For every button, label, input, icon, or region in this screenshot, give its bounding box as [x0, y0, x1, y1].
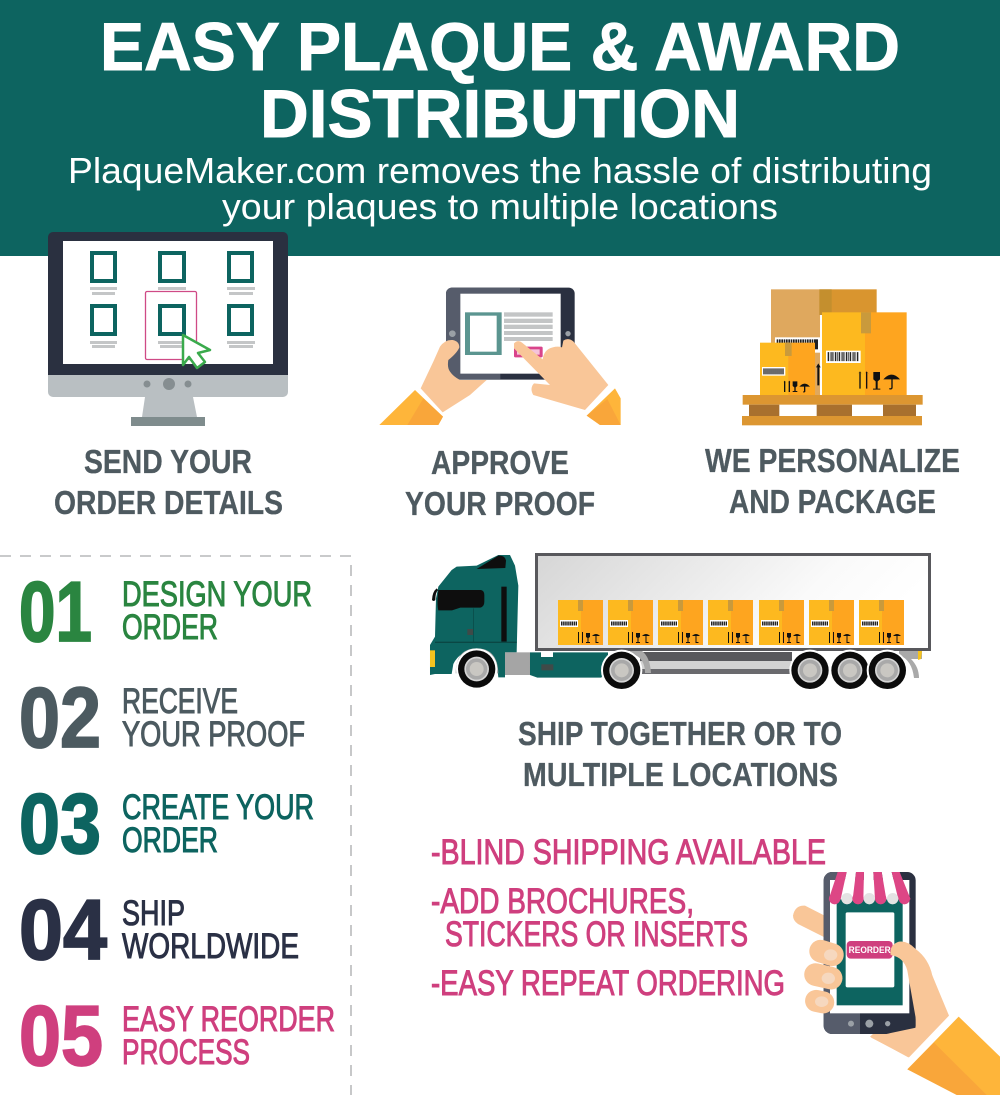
step 03: [19, 777, 314, 872]
step 02: RECEIVE: [122, 682, 238, 721]
step 04: SHIP: [122, 894, 185, 933]
reorder button: REORDER: [849, 945, 891, 955]
subtitle: [68, 150, 932, 227]
subtitle: your plaques to multiple locations: [222, 186, 778, 227]
title: EASY PLAQUE & AWARD: [100, 9, 900, 85]
label: send your order details: ORDER DETAILS: [54, 484, 283, 521]
label: ship together or to multiple locations: [518, 715, 842, 793]
label: approve your proof: APPROVE: [431, 444, 569, 481]
step 05: 05: [19, 989, 103, 1084]
reorder button: [847, 941, 893, 959]
rear wheels: [789, 650, 908, 691]
step 03: CREATE YOUR: [122, 788, 314, 827]
step 04: [19, 883, 299, 978]
feature list: -EASY REPEAT ORDERING: [431, 964, 785, 1003]
step 05: [19, 989, 335, 1084]
icon: cursor: [183, 335, 210, 368]
subtitle: PlaqueMaker.com removes the hassle of distributing: [68, 150, 932, 191]
step 04: WORLDWIDE: [122, 927, 299, 966]
step 02: YOUR PROOF: [122, 715, 305, 754]
label: we personalize and package: WE PERSONALIZE: [705, 442, 960, 479]
title: [100, 9, 900, 152]
step 01: DESIGN YOUR: [122, 575, 312, 614]
header banner: [0, 0, 1000, 256]
awning: [829, 872, 911, 904]
feature list: [431, 833, 826, 1003]
label: send your order details: SEND YOUR: [84, 443, 252, 480]
step 05: EASY REORDER: [122, 1000, 335, 1039]
icon: hand holding phone with reorder button: [793, 872, 1000, 1095]
label: approve your proof: [405, 444, 595, 522]
label: send your order details: [54, 443, 283, 521]
step 03: ORDER: [122, 821, 218, 860]
label: ship together or to multiple locations: SHIP TOGETHER OR TO: [518, 715, 842, 752]
cab: [430, 555, 642, 691]
chassis: [640, 652, 792, 661]
panel: numbered steps: [0, 556, 351, 1095]
step 01: ORDER: [122, 608, 218, 647]
step 03: 03: [19, 777, 101, 872]
step 04: 04: [19, 883, 107, 978]
trailer: [536, 554, 930, 650]
title: DISTRIBUTION: [260, 76, 740, 152]
step 05: PROCESS: [122, 1033, 250, 1072]
icon: desktop monitor: [48, 232, 288, 426]
step 02: [19, 671, 305, 766]
step 01: [19, 565, 312, 660]
feature list: -BLIND SHIPPING AVAILABLE: [431, 833, 826, 872]
step 02: 02: [19, 671, 101, 766]
label: approve your proof: YOUR PROOF: [405, 485, 595, 522]
label: we personalize and package: AND PACKAGE: [729, 483, 936, 520]
label: ship together or to multiple locations: MULTIPLE LOCATIONS: [523, 756, 838, 793]
feature list: -ADD BROCHURES,: [431, 882, 694, 921]
icon: boxes on pallet: [742, 289, 923, 425]
icon: hands holding tablet: [379, 288, 621, 425]
label: we personalize and package: [705, 442, 960, 520]
icon: delivery truck: [430, 554, 930, 691]
feature list: STICKERS OR INSERTS: [445, 915, 748, 954]
step 01: 01: [19, 565, 92, 660]
